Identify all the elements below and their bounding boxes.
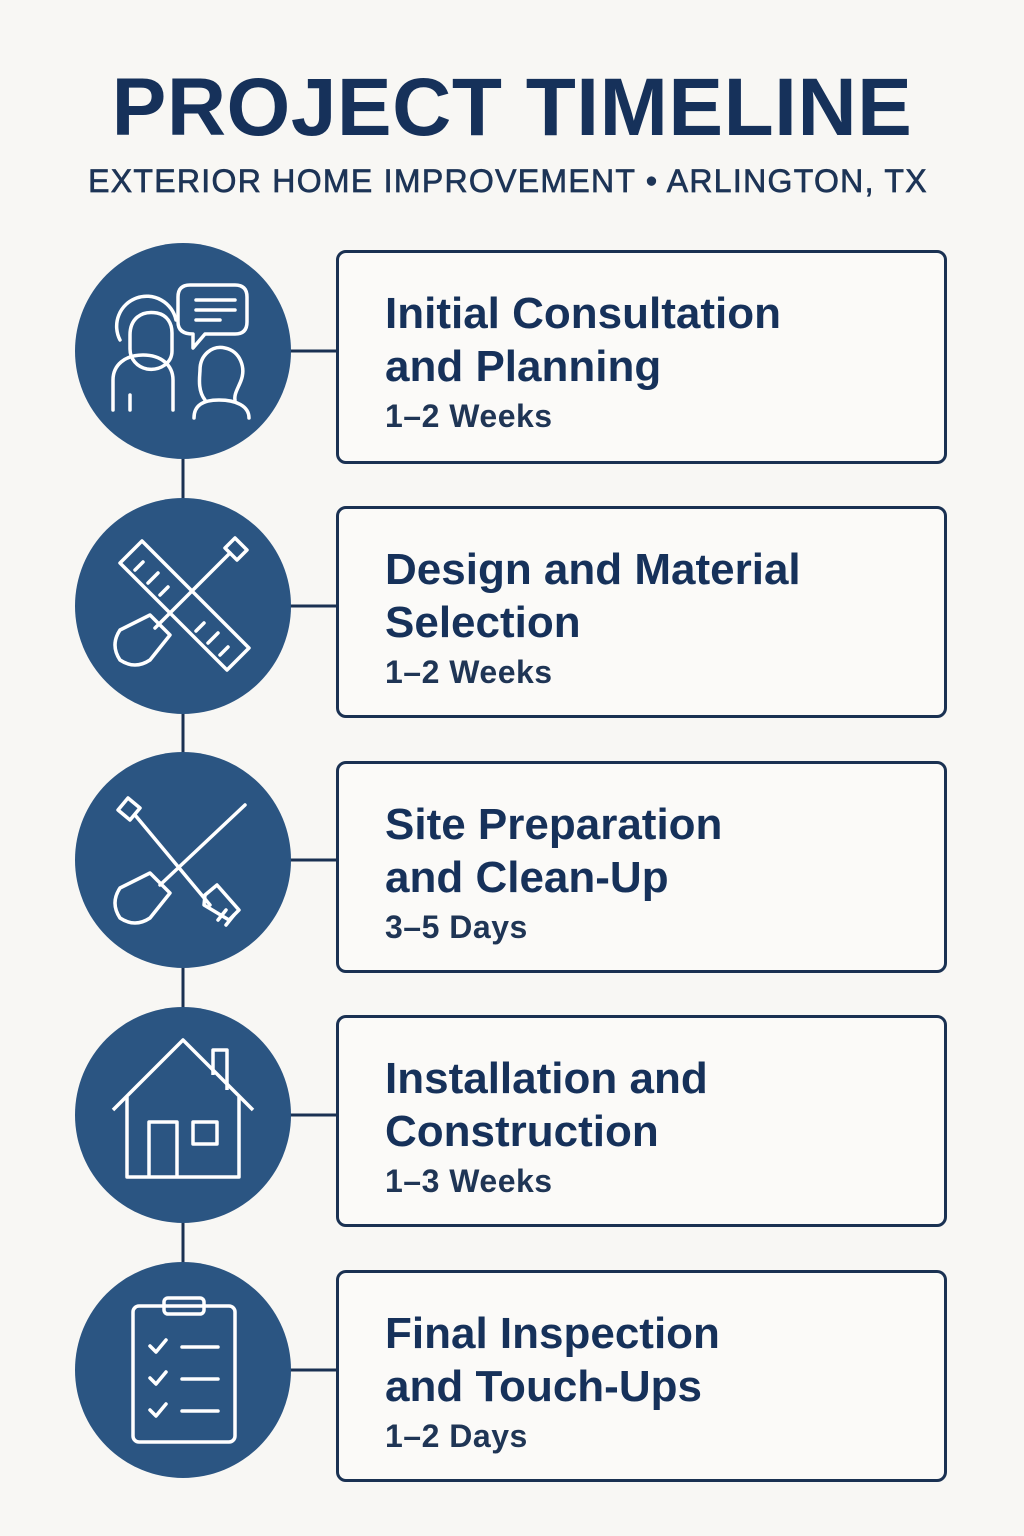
card: step 1 [336,250,947,464]
icon: consultation [75,243,291,459]
card: step 1: and Planning [385,342,661,391]
card: step 1: Initial Consultation [385,289,781,338]
card: step 3: Site Preparation [385,800,722,849]
title: PROJECT TIMELINE [112,62,912,153]
card: step 4: 1–3 Weeks [385,1163,553,1199]
card: step 2: 1–2 Weeks [385,654,553,690]
subtitle: EXTERIOR HOME IMPROVEMENT • ARLINGTON, TX [88,163,928,199]
card: step 4: Construction [385,1107,659,1156]
icon: design tools [75,498,291,714]
card: step 2: Selection [385,598,581,647]
card: step 1: 1–2 Weeks [385,398,553,434]
card: step 3: 3–5 Days [385,909,528,945]
icon: shovel and rake [75,752,291,968]
card: step 4 [336,1015,947,1227]
card: step 2: Design and Material [385,545,801,594]
card: step 3 [336,761,947,973]
card: step 5: and Touch-Ups [385,1362,702,1411]
card: step 5: 1–2 Days [385,1418,528,1454]
card: step 4: Installation and [385,1054,708,1103]
card: step 2 [336,506,947,718]
card: step 5: Final Inspection [385,1309,720,1358]
icon: checklist [75,1262,291,1478]
icon: house [75,1007,291,1223]
card: step 5 [336,1270,947,1482]
card: step 3: and Clean-Up [385,853,669,902]
